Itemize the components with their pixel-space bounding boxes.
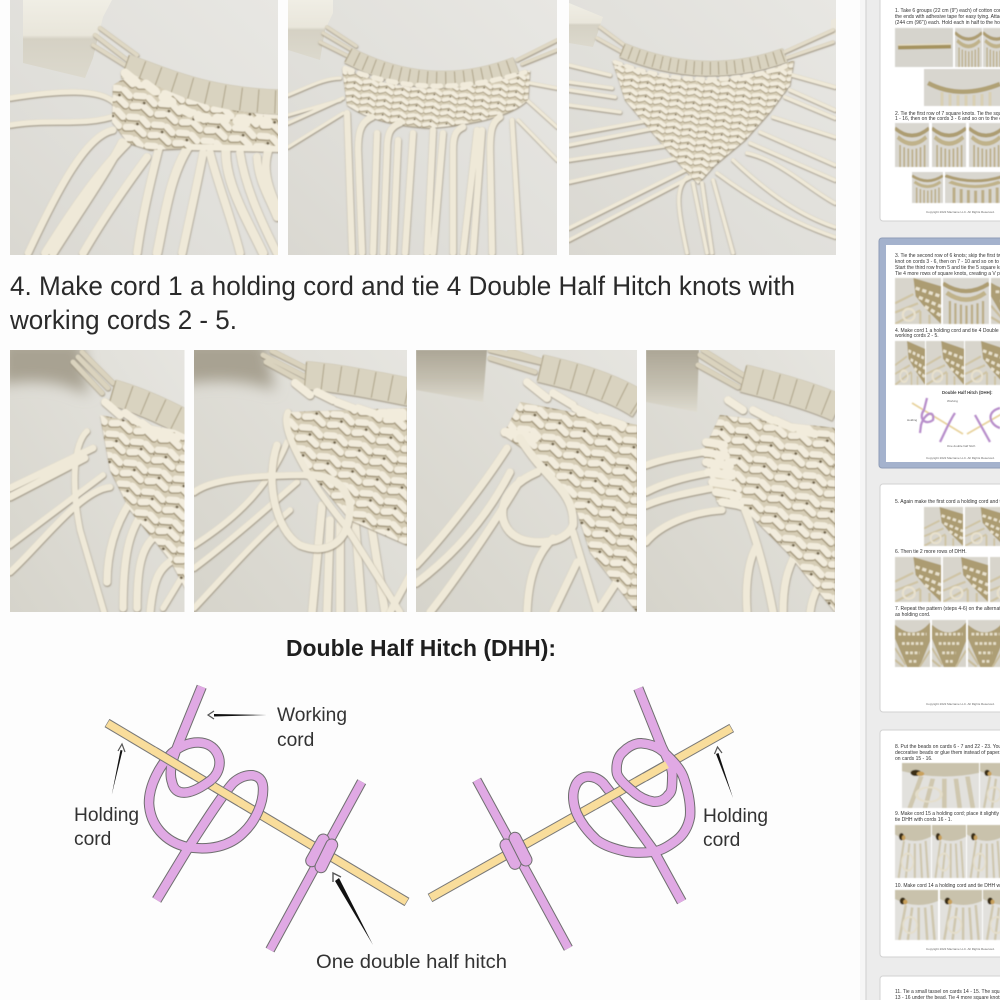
label: right holding cord: Holding (703, 806, 768, 827)
panel: step 4 photo 3 (416, 350, 637, 612)
panel: step 3 photo 3 (569, 0, 836, 255)
thumbnail page 5 (880, 976, 1000, 1000)
thumbnail page 1 (880, 0, 1000, 221)
tape (288, 0, 333, 60)
thumbnail page 2 selected: Copyright 2022 Macrame LLC. All Rights Reserved. (926, 456, 995, 460)
knot mass (100, 415, 186, 590)
label: working cord: cord (277, 730, 314, 751)
working cord forming loops (149, 687, 263, 900)
holding cord right (430, 728, 732, 898)
holding cord over loop crossings (153, 750, 242, 804)
panel: step 4 photo 1 (10, 350, 184, 612)
knot: one double half hitch left (312, 840, 332, 867)
cord pattern (569, 27, 835, 253)
thumbnail page 3 (880, 484, 1000, 712)
thumbnail page 4: tie DHH with cords 16 - 1. (895, 817, 952, 823)
knot: one double half hitch right (506, 838, 526, 863)
thumbnail page 3: 6. Then tie 2 more rows of DHH. (895, 549, 967, 555)
table shadow (180, 340, 275, 390)
cord pattern (416, 350, 640, 612)
label: left holding cord: Holding (74, 805, 139, 826)
cord pattern (10, 28, 280, 253)
label: working cord: Working (277, 705, 347, 726)
thumbnail page 2 selected: Working (947, 399, 958, 403)
working cord forming loops (573, 688, 690, 902)
cord pattern (10, 352, 190, 612)
thumbnail page 3: Copyright 2022 Macrame LLC. All Rights Reserved. (926, 702, 995, 706)
tape (23, 0, 112, 78)
arrow: one double half hitch (333, 873, 373, 945)
finished working cord (477, 780, 568, 948)
step 4 instruction text (9, 271, 795, 335)
thumbnail page 2 selected: working cords 2 - 5. (895, 333, 939, 339)
knot mass (287, 408, 407, 545)
panel: step 4 photo 4 (646, 350, 835, 612)
thumbnail page 3: as holding cord. (895, 612, 930, 618)
step 4 instruction text: working cords 2 - 5. (9, 305, 237, 335)
panel: step 3 photo 1 (10, 0, 278, 255)
arrow: right holding cord (714, 747, 733, 798)
arrow: left holding cord (112, 744, 125, 795)
thumbnail page 1: Copyright 2022 Macrame LLC. All Rights Reserved. (926, 210, 995, 214)
thumbnail page 4: Copyright 2022 Macrame LLC. All Rights Reserved. (926, 947, 995, 951)
tape with shadow (646, 350, 699, 412)
thumbnail page 2 selected (879, 238, 1000, 468)
hanging cords (194, 442, 385, 612)
knot triangle (612, 60, 794, 184)
holding cord left (107, 723, 407, 902)
sidebar: page thumbnails (860, 0, 1000, 1000)
cord pattern (194, 351, 410, 612)
table shadow (0, 340, 88, 395)
label: one double half hitch: One double half hitch (316, 951, 507, 973)
thumbnail page 4 (880, 730, 1000, 957)
thumbnail page 2 selected: Double Half Hitch (DHH): (942, 390, 993, 395)
finished working cord (270, 782, 362, 950)
holding cord over loop crossings (593, 765, 667, 806)
diagram: left double half hitch (107, 687, 407, 950)
cord pattern (288, 27, 557, 253)
panel: step 4 photo 2 (194, 350, 407, 612)
tape (569, 3, 603, 47)
heading: Double Half Hitch: Double Half Hitch (DHH): (286, 635, 556, 661)
thumbnail page 2 selected: Holding (907, 418, 918, 422)
diagram: right double half hitch (430, 688, 732, 948)
thumbnail page 4: on cards 15 - 16. (895, 756, 933, 762)
knot mass (342, 68, 530, 128)
cord pattern (646, 350, 838, 612)
step 4 instruction text: 4. Make cord 1 a holding cord and tie 4 Double Half Hitch knots with (10, 271, 795, 301)
tape with shadow (416, 350, 487, 402)
arrow: working cord (208, 711, 267, 719)
label: left holding cord: cord (74, 829, 111, 850)
panel: step 3 photo 2 (288, 0, 557, 255)
label: right holding cord: cord (703, 830, 740, 851)
knot mass (503, 402, 637, 612)
knot mass (703, 415, 835, 612)
knot mass (112, 74, 280, 150)
thumbnail page 2 selected: One double half hitch (947, 444, 976, 448)
